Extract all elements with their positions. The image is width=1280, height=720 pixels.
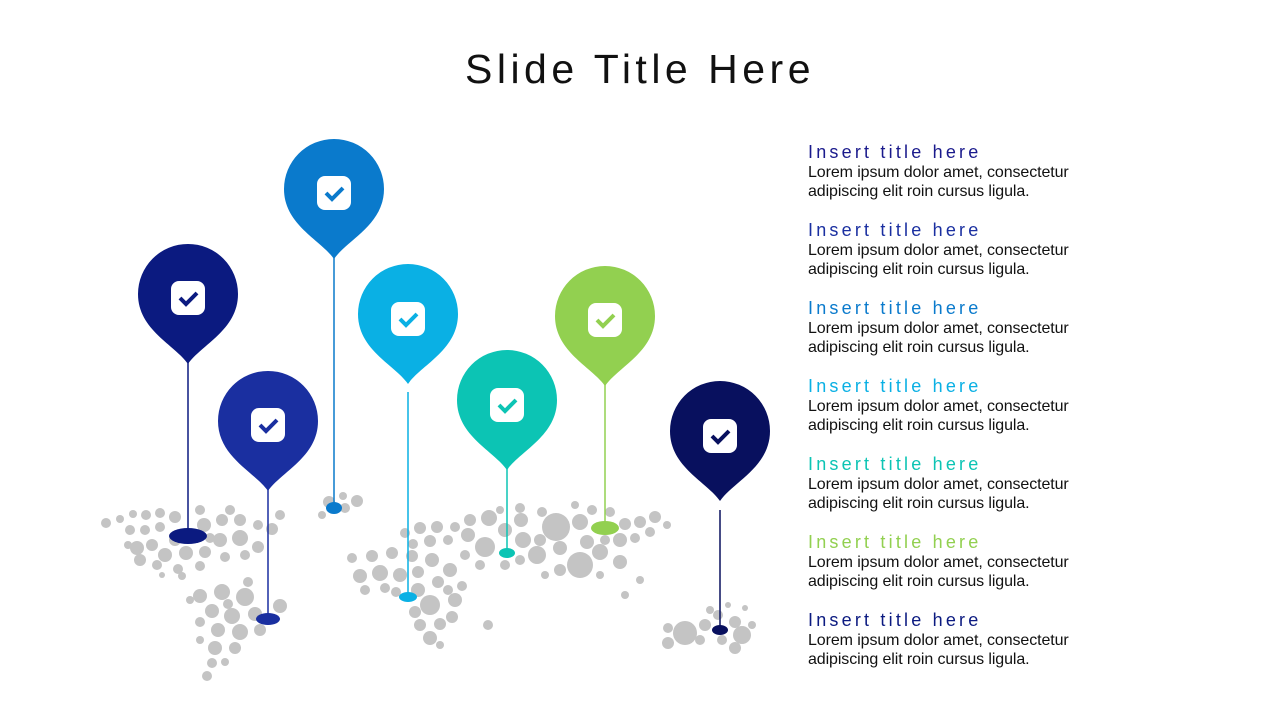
text item 5: Insert title here	[808, 454, 981, 474]
pin 4	[358, 264, 458, 602]
text item 7: Insert title here	[808, 610, 981, 630]
text item 6: Insert title here	[808, 532, 981, 552]
pin 1	[138, 244, 238, 544]
text item 7: Lorem ipsum dolor amet, consectetur	[808, 632, 1069, 649]
text item 2: Insert title here	[808, 220, 981, 240]
text item 2: Lorem ipsum dolor amet, consectetur	[808, 242, 1069, 259]
text item 6	[808, 532, 1069, 590]
pin 5	[457, 350, 557, 558]
text item 3: Lorem ipsum dolor amet, consectetur	[808, 320, 1069, 337]
pin 3	[284, 139, 384, 514]
pin 7	[670, 381, 770, 635]
text item 4: Insert title here	[808, 376, 981, 396]
text item 1: Lorem ipsum dolor amet, consectetur	[808, 164, 1069, 181]
text item 2: adipiscing elit roin cursus ligula.	[808, 261, 1030, 278]
text item 6: adipiscing elit roin cursus ligula.	[808, 573, 1030, 590]
text item 5	[808, 454, 1069, 512]
text item 1: adipiscing elit roin cursus ligula.	[808, 183, 1030, 200]
text item 3: Insert title here	[808, 298, 981, 318]
text item 1	[808, 142, 1069, 200]
dotted world map	[101, 492, 756, 681]
pin 2	[218, 371, 318, 625]
text item 4	[808, 376, 1069, 434]
text item 2	[808, 220, 1069, 278]
text item 1: Insert title here	[808, 142, 981, 162]
text item 4: Lorem ipsum dolor amet, consectetur	[808, 398, 1069, 415]
text item 3: adipiscing elit roin cursus ligula.	[808, 339, 1030, 356]
text item 3	[808, 298, 1069, 356]
title: Slide Title Here	[465, 46, 815, 92]
text item 7: adipiscing elit roin cursus ligula.	[808, 651, 1030, 668]
text item 6: Lorem ipsum dolor amet, consectetur	[808, 554, 1069, 571]
text item 4: adipiscing elit roin cursus ligula.	[808, 417, 1030, 434]
pin 6	[555, 266, 655, 535]
text item 5: adipiscing elit roin cursus ligula.	[808, 495, 1030, 512]
text item 5: Lorem ipsum dolor amet, consectetur	[808, 476, 1069, 493]
text item 7	[808, 610, 1069, 668]
